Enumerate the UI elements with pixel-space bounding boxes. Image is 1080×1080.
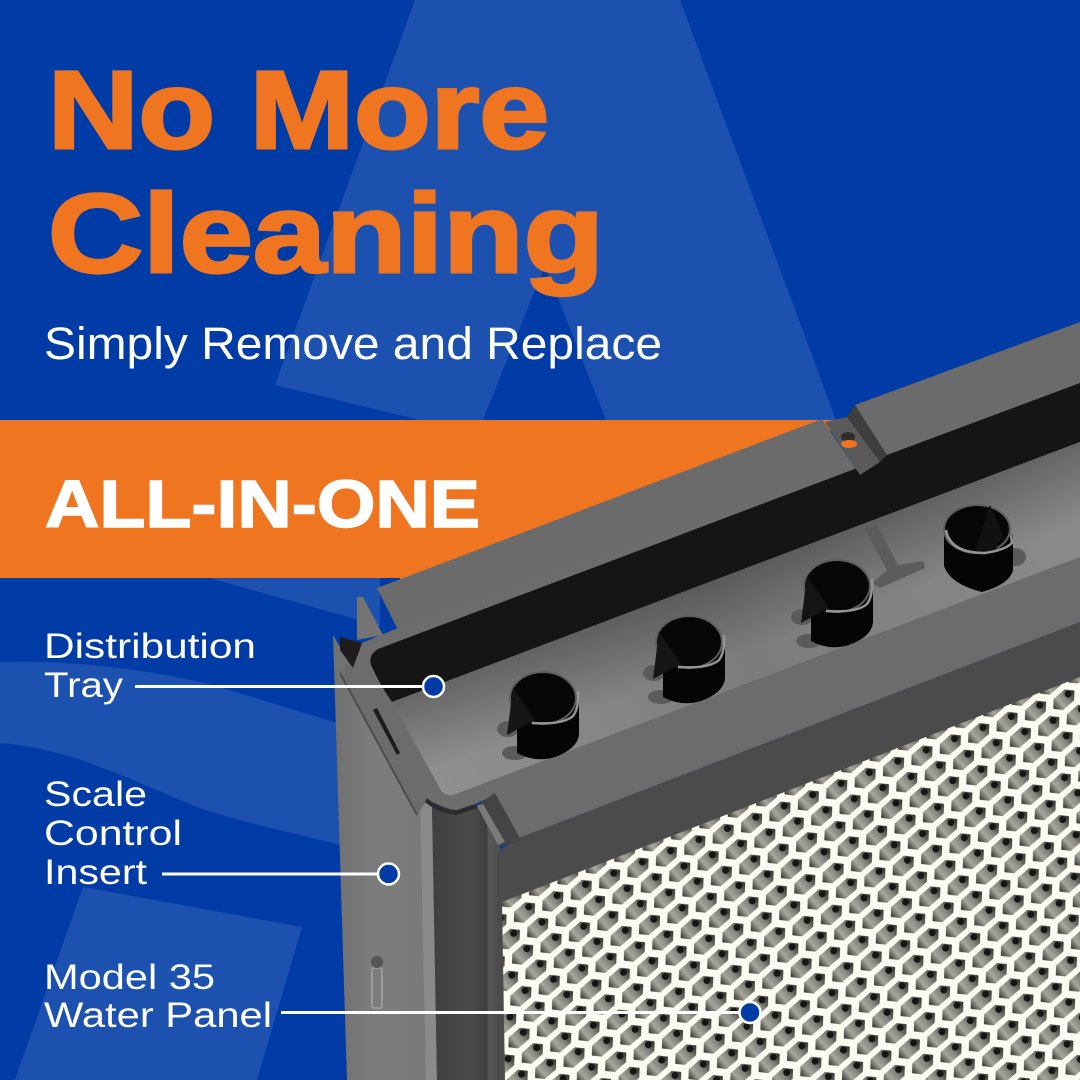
black channel bbox=[370, 383, 1080, 702]
side edge line bbox=[340, 673, 417, 815]
side highlight strip bbox=[420, 800, 437, 1080]
subtitle: Simply Remove and Replace bbox=[44, 318, 662, 369]
callout: scale control insert bbox=[44, 775, 399, 892]
side clip bbox=[371, 956, 383, 1008]
tray body and front lip bbox=[340, 383, 1080, 838]
notch tab bbox=[825, 405, 887, 475]
corner seam bbox=[425, 798, 478, 815]
slot bbox=[373, 708, 400, 755]
upper flange bbox=[855, 322, 1080, 457]
banner heading: ALL-IN-ONE bbox=[45, 467, 480, 542]
callout: model 35 water panel: Model 35 bbox=[44, 958, 215, 997]
left spike bbox=[357, 597, 383, 640]
callout: distribution tray: Distribution bbox=[44, 627, 256, 666]
mesh media bbox=[502, 677, 1080, 1080]
orange band bbox=[0, 420, 838, 590]
nozzle clip 2 bbox=[643, 615, 725, 704]
back flange bbox=[377, 419, 860, 630]
top corner bbox=[340, 637, 362, 668]
nozzle clip 4 bbox=[943, 504, 1026, 592]
background pattern shapes bbox=[0, 0, 836, 1080]
product: water panel assembly bbox=[333, 322, 1080, 1080]
tray floor bbox=[392, 442, 1080, 795]
callout: distribution tray bbox=[44, 627, 444, 705]
nozzle clip 1 bbox=[497, 671, 579, 760]
corner tab bbox=[477, 793, 521, 847]
callout: model 35 water panel: Water Panel bbox=[44, 996, 272, 1035]
frame bbox=[497, 622, 1080, 1080]
title bbox=[48, 49, 604, 296]
title: No More bbox=[48, 49, 549, 172]
nozzle clip 3 bbox=[791, 559, 873, 648]
callout: scale control insert: Insert bbox=[44, 853, 147, 892]
callout: distribution tray: Tray bbox=[44, 666, 124, 705]
callout: scale control insert: Scale bbox=[44, 775, 147, 814]
callout: scale control insert: Control bbox=[44, 814, 182, 853]
title: Cleaning bbox=[48, 171, 604, 296]
corner post bbox=[432, 805, 500, 1080]
callout: model 35 water panel bbox=[44, 958, 760, 1035]
side panel: scale control insert bbox=[333, 635, 437, 1080]
T-shaped mark bbox=[865, 525, 925, 588]
